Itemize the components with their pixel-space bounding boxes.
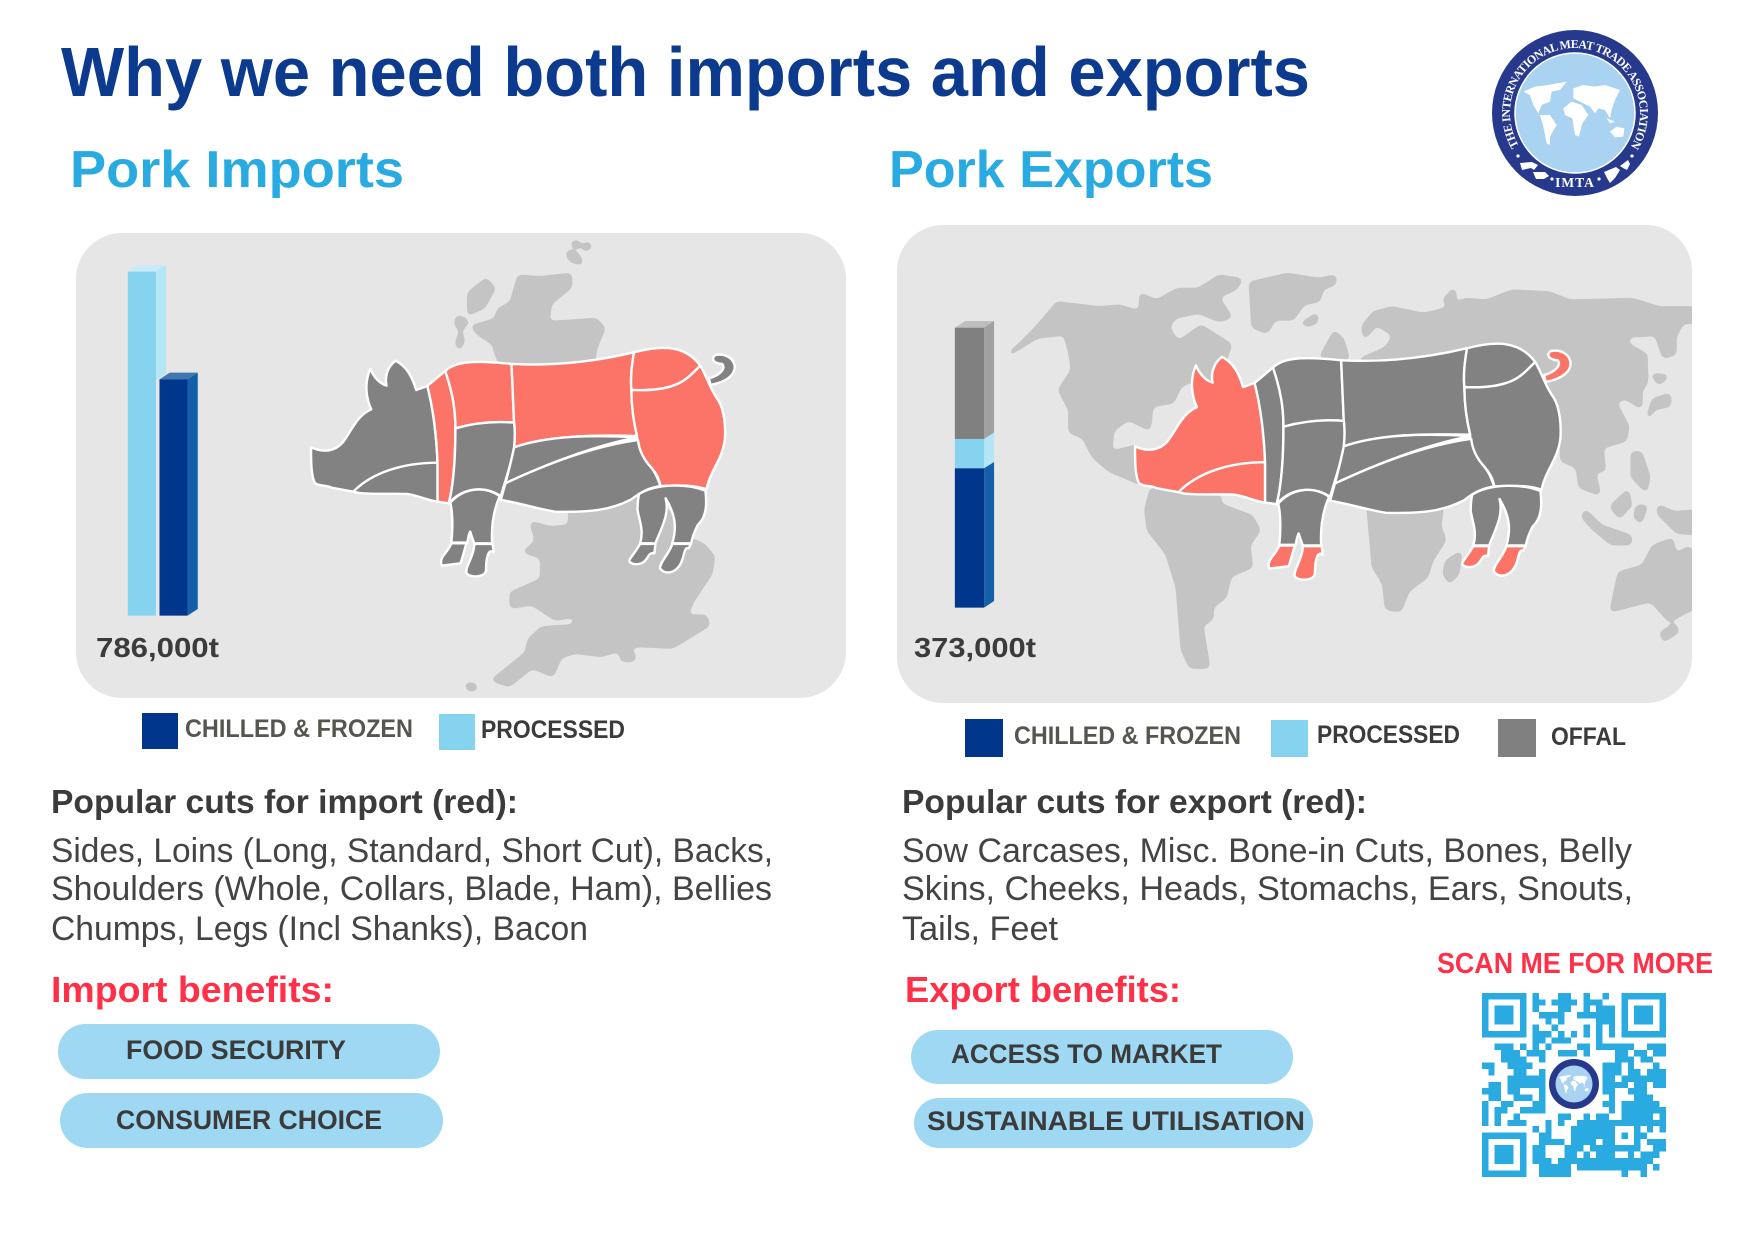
pig: imports, body cuts in red xyxy=(311,348,735,576)
pill: food security xyxy=(58,1024,440,1079)
heading: export benefits: Export benefits: xyxy=(905,969,1181,1010)
text block: import cuts: Sides, Loins (Long, Standard, Short Cut), Backs, xyxy=(51,832,773,870)
pill: consumer choice xyxy=(60,1093,443,1148)
panel: exports xyxy=(897,225,1695,703)
text block: export cuts: Tails, Feet xyxy=(902,910,1059,948)
callout: scan me: SCAN ME FOR MORE xyxy=(1437,948,1713,980)
QR code xyxy=(1482,993,1666,1177)
pill: consumer choice: CONSUMER CHOICE xyxy=(116,1105,382,1135)
legend: imports xyxy=(142,713,625,750)
title: Why we need both imports and exports xyxy=(61,33,1310,111)
legend: exports: CHILLED & FROZEN xyxy=(1014,722,1241,750)
pill: sustainable utilisation: SUSTAINABLE UTILISATION xyxy=(927,1106,1305,1136)
heading: import benefits: Import benefits: xyxy=(51,969,334,1010)
text block: export cuts: Skins, Cheeks, Heads, Stomachs, Ears, Snouts, xyxy=(902,870,1633,908)
text block: import cuts xyxy=(51,832,773,948)
text block: export cuts: Sow Carcases, Misc. Bone-in Cuts, Bones, Belly xyxy=(902,832,1632,870)
subheading: popular export cuts: Popular cuts for export (red): xyxy=(902,783,1367,820)
legend: exports: OFFAL xyxy=(1551,723,1626,751)
logo: IMTA roundel: THE INTERNATIONAL MEAT TRADE ASSOCIATION xyxy=(1502,40,1648,150)
logo: IMTA roundel xyxy=(1492,30,1658,196)
map: world xyxy=(1010,275,1695,667)
subheading: popular import cuts: Popular cuts for import (red): xyxy=(51,783,518,820)
heading: pork exports: Pork Exports xyxy=(889,141,1213,199)
logo: IMTA roundel: IMTA xyxy=(1555,175,1595,190)
legend: imports: CHILLED & FROZEN xyxy=(185,715,413,743)
pill: food security: FOOD SECURITY xyxy=(126,1035,346,1065)
chart: imports stacked bars xyxy=(128,265,198,616)
map: UK xyxy=(456,241,713,689)
text block: export cuts xyxy=(902,832,1633,948)
chart: exports stacked bar xyxy=(955,321,994,608)
pig: exports, head, feet and tail in red xyxy=(1135,344,1571,580)
legend: imports: PROCESSED xyxy=(481,716,625,744)
label: imports tonnage: 786,000t xyxy=(96,632,219,663)
text block: import cuts: Shoulders (Whole, Collars, Blade, Ham), Bellies xyxy=(51,870,772,908)
pill: sustainable utilisation xyxy=(914,1098,1313,1148)
label: exports tonnage: 373,000t xyxy=(914,632,1036,663)
text block: import cuts: Chumps, Legs (Incl Shanks), Bacon xyxy=(51,910,588,948)
legend: exports xyxy=(965,719,1626,757)
pill: access to market: ACCESS TO MARKET xyxy=(951,1039,1222,1069)
legend: exports: PROCESSED xyxy=(1317,721,1460,749)
heading: pork imports: Pork Imports xyxy=(70,141,404,199)
panel: imports xyxy=(76,233,846,698)
pill: access to market xyxy=(911,1030,1293,1084)
